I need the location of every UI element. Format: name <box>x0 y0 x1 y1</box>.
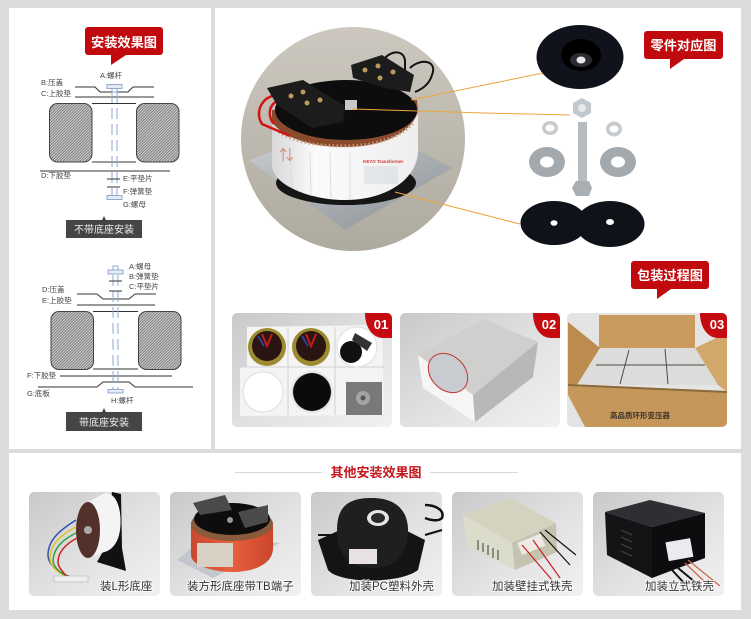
tag: without base: 不带底座安装 <box>74 223 134 236</box>
part: bolt, nut and washers <box>529 98 636 196</box>
callout: packaging process <box>631 261 709 299</box>
heading: 其他安装效果图 <box>330 465 422 480</box>
diagram: with base: B:弹簧垫 <box>129 271 159 281</box>
diagram: without base: F:弹簧垫 <box>123 186 153 196</box>
panel: parts and packaging <box>215 8 741 449</box>
badge 03 <box>700 313 727 338</box>
part: rubber pads <box>520 201 644 247</box>
diagram: without base: G:螺母 <box>123 199 146 209</box>
card: vertical iron case: 加装立式铁壳 <box>645 579 714 593</box>
diagram: with base: E:上胶垫 <box>42 295 72 305</box>
photo 02: carton <box>400 313 560 427</box>
card: L-shaped base <box>29 492 160 596</box>
callout: packaging process: 包装过程图 <box>637 267 703 283</box>
card: PC plastic shell <box>311 492 443 596</box>
tag: with base <box>66 408 142 431</box>
leader lines <box>352 72 570 224</box>
badge 03: 03 <box>710 317 724 332</box>
diagram: without base: B:压盖 <box>41 77 64 87</box>
callout: parts diagram: 零件对应图 <box>651 37 716 53</box>
callout: installation effect: 安装效果图 <box>91 34 157 50</box>
badge 01 <box>365 313 392 338</box>
diagram: without base <box>40 70 179 209</box>
tag: without base <box>66 216 142 238</box>
diagram: without base: D:下胶垫 <box>41 170 71 180</box>
panel: installation diagrams <box>9 8 211 449</box>
diagram: with base: G:底板 <box>27 388 50 398</box>
diagram: with base: F:下胶垫 <box>27 370 57 380</box>
callout: installation effect <box>85 27 163 65</box>
diagram: without base: A:螺杆 <box>100 70 123 80</box>
tag: with base: 带底座安装 <box>79 416 129 429</box>
photo: toroidal transformer <box>241 27 465 251</box>
diagram: with base: C:平垫片 <box>129 281 159 291</box>
badge 01: 01 <box>374 317 388 332</box>
callout: parts diagram <box>644 31 723 69</box>
diagram: without base: C:上胶垫 <box>41 88 71 98</box>
card: vertical iron case <box>593 492 724 596</box>
photo 03: packed box: 高品质环形变压器 <box>610 410 670 420</box>
card: square base with TB terminal: 装方形底座带TB端子 <box>187 579 294 593</box>
badge 02: 02 <box>542 317 556 332</box>
badge 02 <box>533 313 560 338</box>
card: L-shaped base: 装L形底座 <box>100 579 152 593</box>
panel: other installation options <box>9 453 741 610</box>
part: top cover disc <box>536 25 624 89</box>
card: PC plastic shell: 加装PC塑料外壳 <box>349 579 434 593</box>
photo 03: packed box <box>567 313 727 427</box>
diagram: with base: H:螺杆 <box>111 395 134 405</box>
diagram: with base: D:压盖 <box>42 284 65 294</box>
diagram: with base <box>27 261 193 405</box>
card: wall-mounted iron case <box>452 492 583 596</box>
photo: toroidal transformer: ⇅ <box>279 147 294 164</box>
card: square base with TB terminal <box>170 492 301 596</box>
diagram: without base: E:平垫片 <box>123 173 153 183</box>
photo 01: foam tray <box>232 313 392 427</box>
card: wall-mounted iron case: 加装壁挂式铁壳 <box>492 579 573 593</box>
diagram: with base: A:螺母 <box>129 261 152 271</box>
photo: toroidal transformer: KEYO Transformer <box>363 159 404 164</box>
